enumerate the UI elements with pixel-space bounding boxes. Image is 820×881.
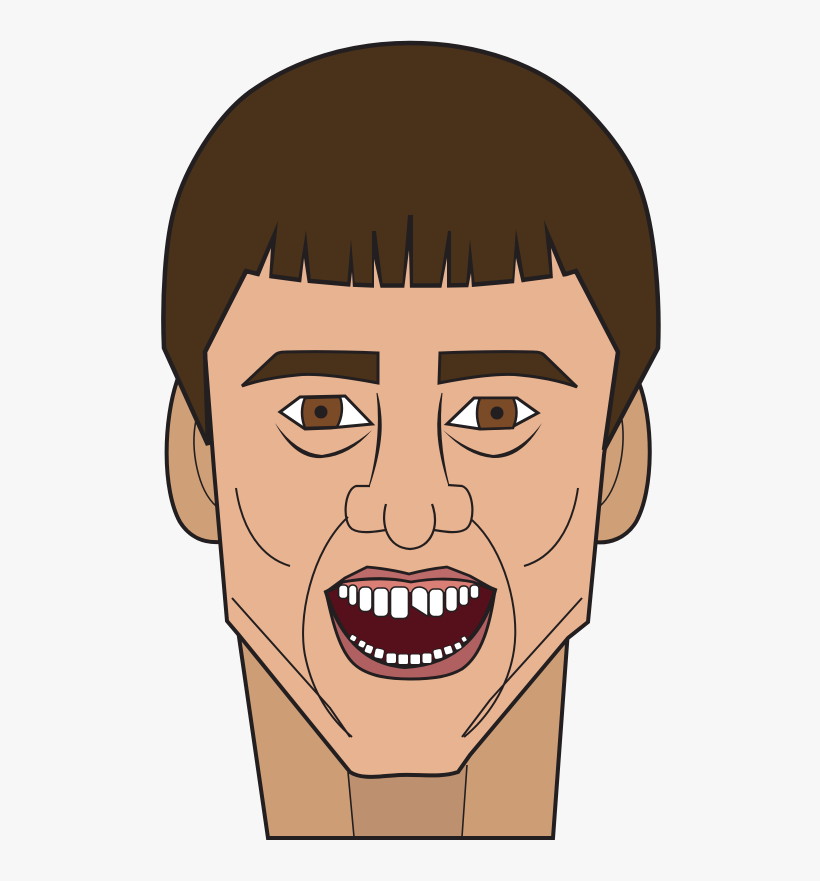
mouth interior	[326, 580, 495, 667]
skin notches between spikes	[259, 248, 563, 290]
right eye	[447, 398, 538, 429]
right eyebrow	[439, 352, 577, 387]
lower teeth	[349, 634, 468, 664]
fringe spikes	[256, 215, 567, 287]
upper teeth	[338, 585, 479, 618]
face	[205, 272, 618, 777]
neck	[238, 630, 568, 838]
left eyebrow	[242, 352, 378, 386]
upper gum	[340, 580, 480, 592]
nose	[346, 393, 472, 549]
mouth	[326, 567, 495, 679]
hair	[163, 43, 658, 450]
upper lip	[326, 567, 495, 592]
under-eye lines	[275, 423, 542, 458]
jaw and cheek lines	[232, 488, 582, 737]
right ear	[590, 380, 650, 542]
left eye	[280, 396, 372, 429]
lower lip	[326, 590, 495, 679]
left ear	[167, 378, 230, 542]
hair mass	[163, 43, 658, 450]
